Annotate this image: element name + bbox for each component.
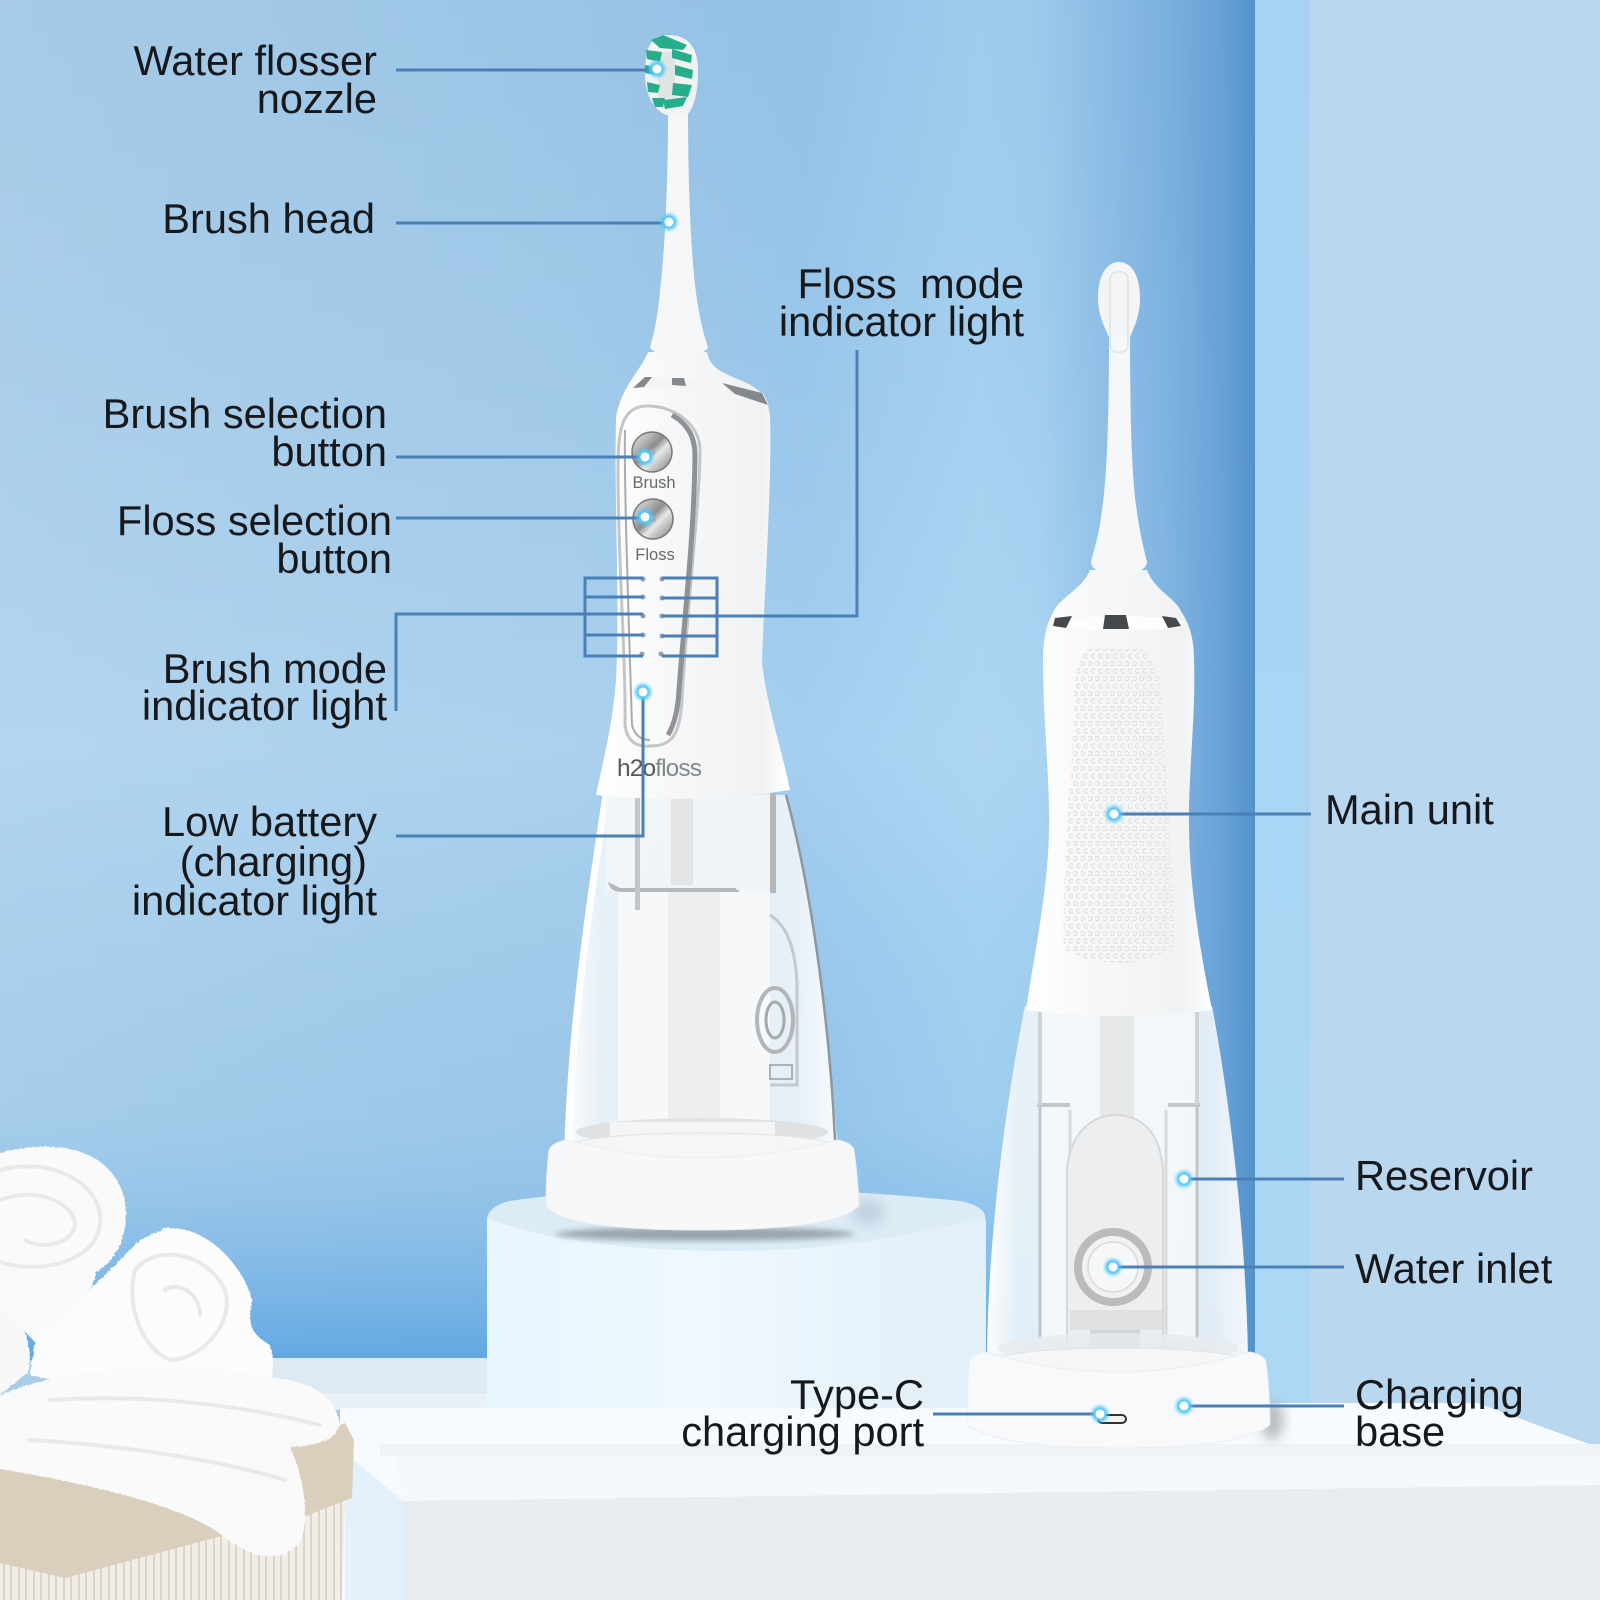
label: brush mode indicator light: Brush mode	[163, 645, 387, 692]
label: low battery indicator light	[132, 798, 377, 924]
control panel trim	[618, 406, 700, 746]
towels in basket	[0, 1147, 354, 1600]
label: low battery indicator light: (charging)	[180, 838, 367, 885]
label: floss mode indicator light: indicator light	[779, 298, 1024, 345]
towel shapes	[0, 1147, 340, 1556]
brush head, right device	[1098, 262, 1140, 352]
label: main unit: Main unit	[1325, 786, 1494, 833]
label: reservoir: Reservoir	[1355, 1152, 1533, 1199]
label: type-C charging port	[681, 1371, 924, 1455]
background wall	[0, 0, 1255, 1360]
towel fold details	[0, 1166, 320, 1480]
label: type-C charging port: Type-C	[790, 1371, 924, 1418]
label: brush mode indicator light: indicator light	[142, 682, 387, 729]
label: charging base: Charging	[1355, 1371, 1524, 1418]
label: brush selection button: Brush selection	[103, 390, 387, 437]
floor step	[270, 1358, 1255, 1410]
callout leader lines	[396, 70, 1344, 1414]
water inlet ring	[1078, 1232, 1148, 1302]
base shadow	[1260, 1400, 1284, 1440]
reservoir, left device	[566, 790, 837, 1166]
inner capsule	[1067, 1115, 1163, 1352]
brand logo: h2ofloss	[617, 755, 702, 782]
textured silicone grip	[1063, 648, 1173, 963]
label: brush head: Brush head	[162, 195, 375, 242]
label: water flosser nozzle: Water flosser	[134, 37, 377, 84]
white table	[340, 1403, 1600, 1600]
label: brush selection button: button	[271, 428, 387, 475]
reservoir, right device	[987, 1006, 1248, 1382]
right device: water flosser rear view	[967, 262, 1284, 1448]
chrome collar band	[633, 377, 769, 405]
label: water flosser nozzle: nozzle	[257, 75, 377, 122]
wicker basket	[0, 1500, 345, 1600]
nozzle head	[645, 35, 698, 116]
left device: water flosser front view	[546, 35, 859, 1230]
right background panel	[1255, 0, 1600, 1460]
label: charging base	[1355, 1371, 1524, 1455]
handle body, left device	[596, 352, 790, 799]
brush label on device: Brush	[632, 474, 676, 492]
label: low battery indicator light: indicator light	[132, 877, 377, 924]
label: low battery indicator light: Low battery	[162, 798, 377, 845]
brush head shaft	[650, 113, 708, 355]
label: type-C charging port: charging port	[681, 1408, 924, 1455]
type-C port	[1098, 1415, 1126, 1423]
green bristles	[645, 35, 693, 109]
callout marker dots	[635, 61, 1192, 1422]
floss label on device: Floss	[635, 546, 675, 564]
label: floss mode indicator light: Floss mode	[797, 260, 1024, 307]
label: floss mode indicator light	[779, 260, 1024, 345]
chrome collar, right device	[1052, 615, 1184, 630]
cylinder pedestal	[487, 1188, 986, 1408]
label: floss selection button: button	[276, 535, 392, 582]
label: floss selection button	[117, 497, 392, 582]
indicator light dots	[640, 576, 664, 656]
charging base, right device	[967, 1352, 1270, 1448]
label: water flosser nozzle	[134, 37, 377, 122]
label: charging base: base	[1355, 1408, 1445, 1455]
brush button	[632, 432, 672, 472]
brush shaft, right device	[1091, 330, 1147, 574]
label: brush selection button	[103, 390, 387, 475]
charging base, left device	[546, 1140, 859, 1230]
floss button	[633, 499, 673, 539]
handle body, right device	[1026, 570, 1212, 1016]
burlap liner	[0, 1423, 354, 1578]
label: floss selection button: Floss selection	[117, 497, 392, 544]
label: brush mode indicator light	[142, 645, 387, 729]
bristle core	[658, 52, 675, 98]
label: water inlet: Water inlet	[1355, 1245, 1553, 1292]
